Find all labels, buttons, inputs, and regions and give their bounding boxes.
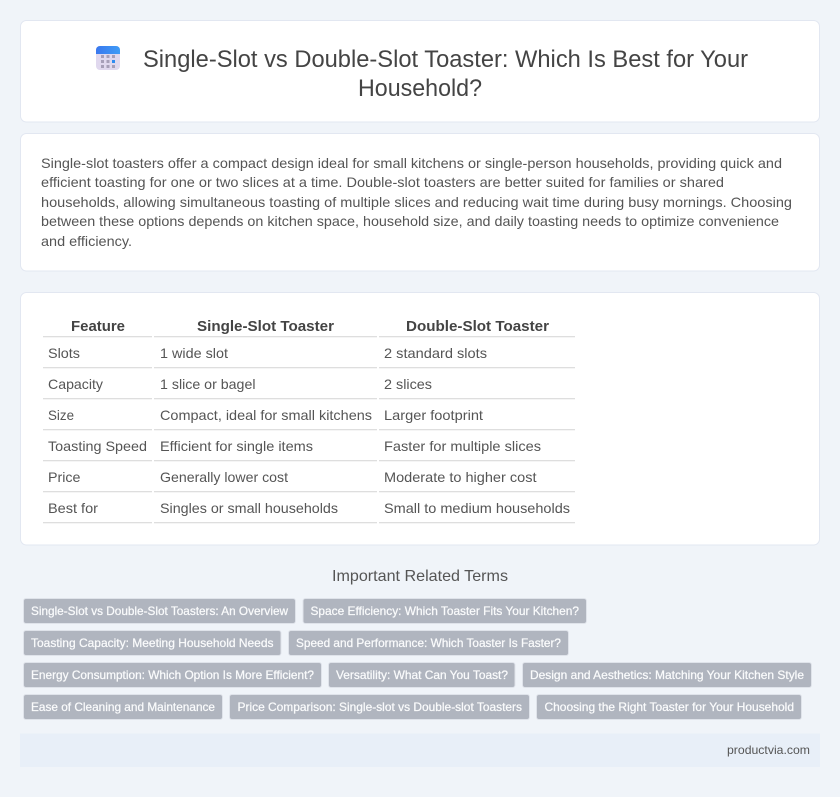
tag: Price Comparison: Single-slot vs Double-slot Toasters: [238, 700, 522, 714]
text block: summary paragraph: households, allowing simultaneous toasting of multiple slices and reducing wait time during busy mornings. Choosing: [41, 194, 792, 210]
icon: calendar: [96, 46, 120, 70]
table row: toasting speed: Efficient for single items: [160, 438, 313, 454]
panel: summary text: [20, 134, 820, 271]
text block: summary paragraph: and efficiency.: [41, 233, 132, 249]
title: Household?: [358, 75, 482, 102]
table row: slots: 1 wide slot: [160, 345, 228, 361]
tag: [522, 662, 812, 688]
title: [143, 46, 748, 102]
text block: summary paragraph: between these options depends on kitchen space, household size, and daily toasting needs to optimize convenience: [41, 213, 779, 229]
title: Single-Slot vs Double-Slot Toaster: Which Is Best for Your: [143, 46, 748, 73]
tag: Ease of Cleaning and Maintenance: [31, 700, 215, 714]
text block: summary paragraph: [41, 155, 792, 249]
tag: [230, 694, 530, 720]
table row: best for: Best for: [48, 500, 98, 516]
footer source text: productvia.com: [727, 743, 810, 757]
related term tags: [24, 598, 812, 720]
footer: [20, 734, 820, 767]
table row: slots: [43, 345, 575, 368]
table row: price: Moderate to higher cost: [384, 469, 537, 485]
tag: Choosing the Right Toaster for Your Household: [544, 700, 794, 714]
table row: best for: [43, 500, 575, 523]
table header row: [43, 318, 575, 337]
tag: Energy Consumption: Which Option Is More Efficient?: [31, 668, 314, 682]
tag: [24, 598, 296, 624]
table row: size: [43, 407, 575, 430]
table row: price: Price: [48, 469, 81, 485]
table header row: Single-Slot Toaster: [197, 318, 334, 335]
table row: capacity: [43, 376, 575, 399]
table row: capacity: 1 slice or bagel: [160, 376, 256, 392]
table header row: Feature: [71, 318, 125, 335]
table row: capacity: 2 slices: [384, 376, 432, 392]
tag: [328, 662, 515, 688]
tag: Versatility: What Can You Toast?: [336, 668, 508, 682]
table row: capacity: Capacity: [48, 376, 103, 392]
table row: slots: Slots: [48, 345, 80, 361]
table row: toasting speed: Faster for multiple slices: [384, 438, 541, 454]
table row: size: Compact, ideal for small kitchens: [160, 407, 372, 423]
table row: price: Generally lower cost: [160, 469, 288, 485]
table row: size: Larger footprint: [384, 407, 483, 423]
table row: toasting speed: [43, 438, 575, 461]
tag: [24, 630, 281, 656]
table row: size: Size: [48, 407, 74, 423]
tag: Speed and Performance: Which Toaster Is Faster?: [296, 636, 561, 650]
panel: comparison table: [20, 292, 820, 545]
tag: [24, 662, 322, 688]
tag: Single-Slot vs Double-Slot Toasters: An Overview: [31, 604, 288, 618]
table row: best for: Small to medium households: [384, 500, 570, 516]
tag: Design and Aesthetics: Matching Your Kitchen Style: [530, 668, 804, 682]
tag: [536, 694, 802, 720]
table header row: Double-Slot Toaster: [406, 318, 549, 335]
heading: important related terms: Important Related Terms: [332, 568, 508, 585]
tag: [303, 598, 586, 624]
tag: [288, 630, 568, 656]
tag: Toasting Capacity: Meeting Household Needs: [31, 636, 274, 650]
header panel: [20, 20, 820, 122]
text block: summary paragraph: efficient toasting for one or two slices at a time. Double-slot toasters are better suited for families or shared: [41, 174, 724, 190]
tag: Space Efficiency: Which Toaster Fits Your Kitchen?: [310, 604, 579, 618]
table row: price: [43, 469, 575, 492]
table row: best for: Singles or small households: [160, 500, 338, 516]
tag: [24, 694, 222, 720]
table row: slots: 2 standard slots: [384, 345, 487, 361]
text block: summary paragraph: Single-slot toasters offer a compact design ideal for small kitchens or single-person households, providing quick and: [41, 155, 782, 171]
table row: toasting speed: Toasting Speed: [48, 438, 147, 454]
